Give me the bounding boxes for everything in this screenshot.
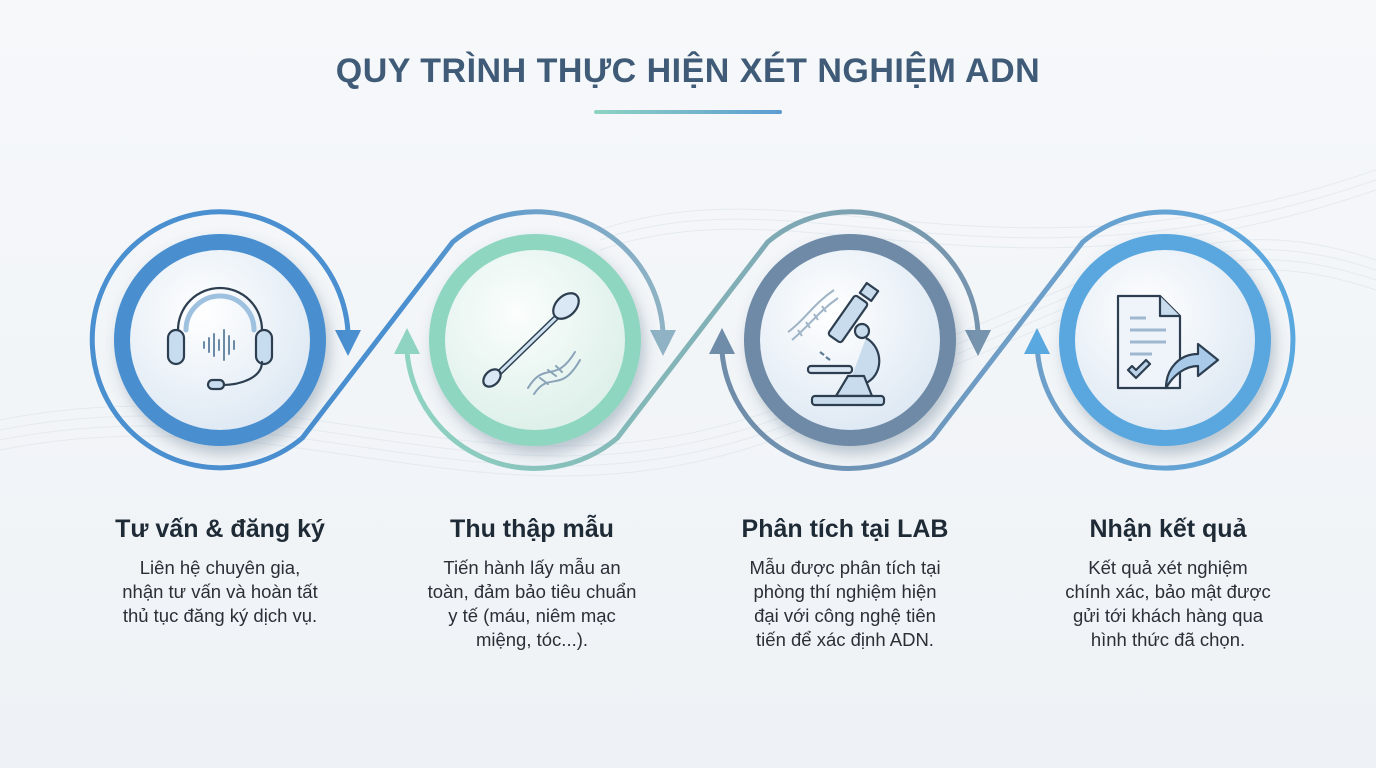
step 2 text: Tiến hành lấy mẫu an: [443, 557, 621, 578]
step 3 text: đại với công nghệ tiên: [754, 605, 936, 626]
step 3 circle: [744, 234, 956, 446]
flow line B: [394, 212, 991, 468]
step 4 text: gửi tới khách hàng qua: [1073, 605, 1263, 626]
icon: microscope with DNA: [788, 283, 884, 405]
flow line A: [92, 212, 676, 468]
step 2 text: toàn, đảm bảo tiêu chuẩn: [428, 581, 636, 602]
title underline: [594, 110, 782, 114]
step 1 text: thủ tục đăng ký dịch vụ.: [123, 605, 317, 626]
step 4 text: Kết quả xét nghiệm: [1088, 557, 1248, 578]
step 4 text: [1065, 515, 1271, 650]
step 1 text: Tư vấn & đăng ký: [115, 515, 325, 543]
icon: swab and DNA: [480, 288, 584, 394]
step 2 circle: [429, 234, 641, 446]
step 4 text: Nhận kết quả: [1090, 515, 1246, 543]
step 3 text: tiến để xác định ADN.: [756, 629, 934, 650]
step 1 text: [115, 515, 325, 626]
step 2 text: miệng, tóc...).: [476, 629, 588, 650]
step 2 text: Thu thập mẫu: [450, 515, 614, 543]
step 1 text: nhận tư vấn và hoàn tất: [122, 581, 318, 602]
step 3 text: [742, 515, 948, 650]
step 2 text: [428, 514, 636, 650]
step 1 circle: [114, 234, 326, 446]
step 4 circle: [1059, 234, 1271, 446]
step 4 text: chính xác, bảo mật được: [1065, 581, 1271, 602]
step 3 text: Mẫu được phân tích tại: [749, 557, 941, 578]
title: QUY TRÌNH THỰC HIỆN XÉT NGHIỆM ADN: [336, 52, 1040, 90]
step 1 text: Liên hệ chuyên gia,: [140, 557, 300, 578]
icon: document with check and arrow: [1118, 296, 1218, 388]
step 3 text: Phân tích tại LAB: [742, 515, 948, 543]
step 4 text: hình thức đã chọn.: [1091, 629, 1245, 650]
step 2 text: y tế (máu, niêm mạc: [448, 605, 616, 626]
step 3 text: phòng thí nghiệm hiện: [753, 581, 937, 602]
icon: headset: [168, 288, 272, 389]
flow line C: [709, 212, 1293, 468]
